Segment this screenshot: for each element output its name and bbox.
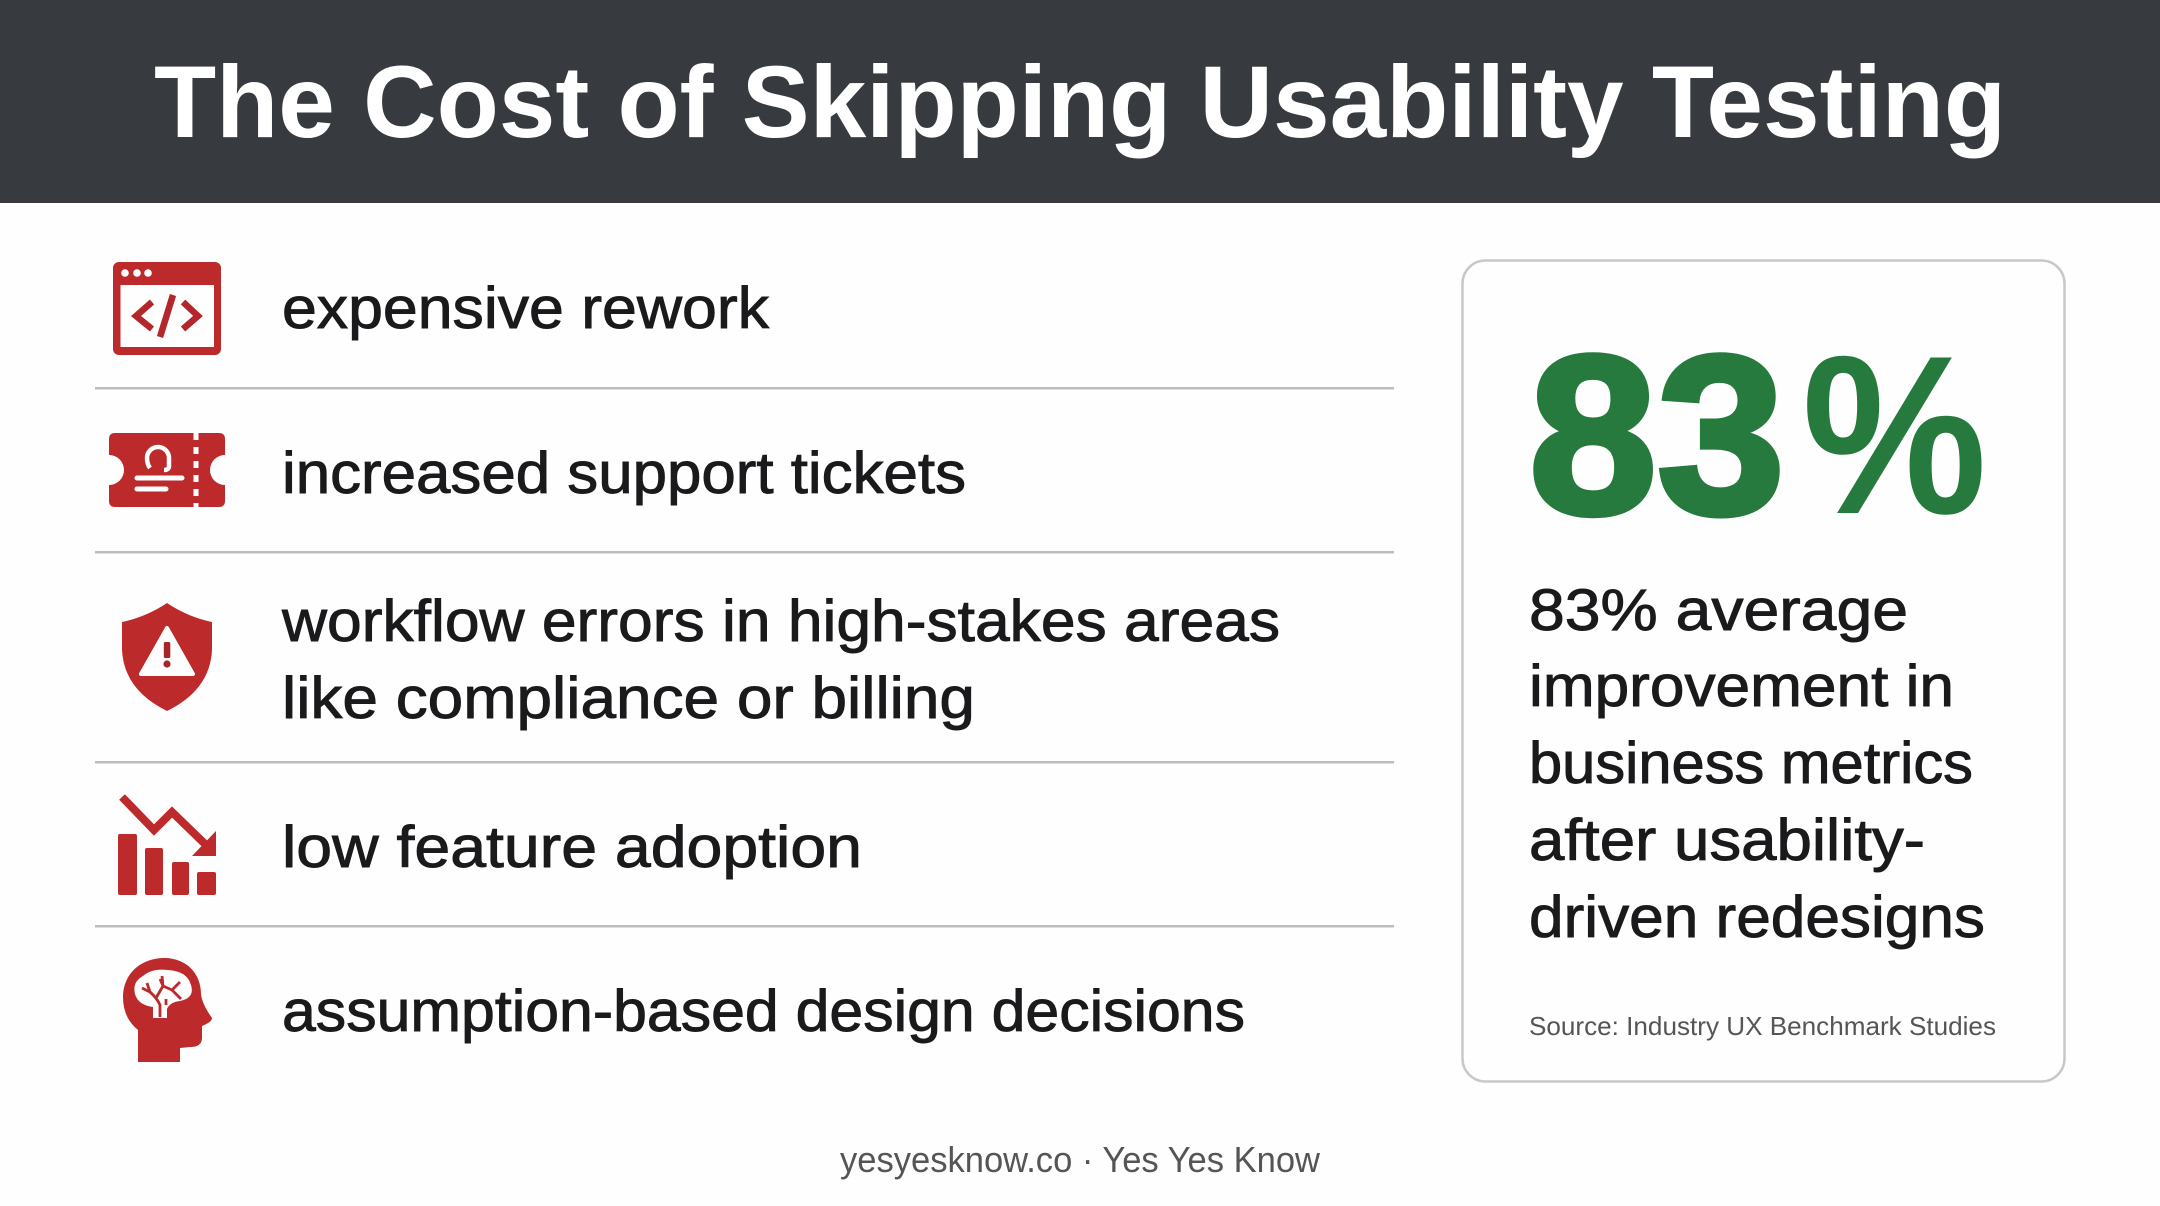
title: The Cost of Skipping Usability Testing: [154, 45, 2006, 159]
source note: Source: Industry UX Benchmark Studies: [1529, 1011, 1996, 1041]
row: low feature adoption: [118, 797, 862, 895]
stat description: 83% average: [1529, 578, 1908, 643]
icon: support ticket: [109, 433, 225, 507]
stat description: driven redesigns: [1529, 885, 1985, 950]
label: assumption-based design: assumption-based design decisions: [282, 979, 1245, 1044]
stat description: improvement in: [1529, 654, 1954, 719]
stat description: after usability-: [1529, 808, 1925, 873]
label: increased support tickets: increased support tickets: [282, 441, 966, 506]
icon: warning shield: [122, 603, 212, 711]
footer credit: yesyesknow.co · Yes Yes Know: [840, 1139, 1321, 1180]
label: workflow errors: workflow errors in high-stakes areas: [281, 589, 1280, 654]
row: increased support tickets: [109, 433, 966, 507]
label: workflow errors: like compliance or billing: [282, 666, 975, 731]
big number: 83%: %: [1802, 308, 1987, 561]
row: expensive rework: [113, 262, 770, 355]
panel: 83% stat card: [1462, 260, 2064, 1082]
icon: code window: [113, 262, 221, 355]
label: workflow errors: [281, 589, 1280, 731]
icon: head with brain: [123, 958, 212, 1062]
stat description: [1529, 578, 1985, 950]
big number: 83%: [1529, 308, 1987, 561]
header banner: [0, 0, 2160, 203]
row: workflow errors: [122, 589, 1280, 731]
label: low feature adoption: low feature adoption: [282, 815, 862, 880]
big number: 83%: 83: [1529, 308, 1785, 561]
row: assumption-based design: [123, 958, 1245, 1062]
label: expensive rework: expensive rework: [282, 276, 770, 341]
icon: declining bar chart: [118, 797, 216, 895]
stat description: business metrics: [1529, 731, 1973, 796]
